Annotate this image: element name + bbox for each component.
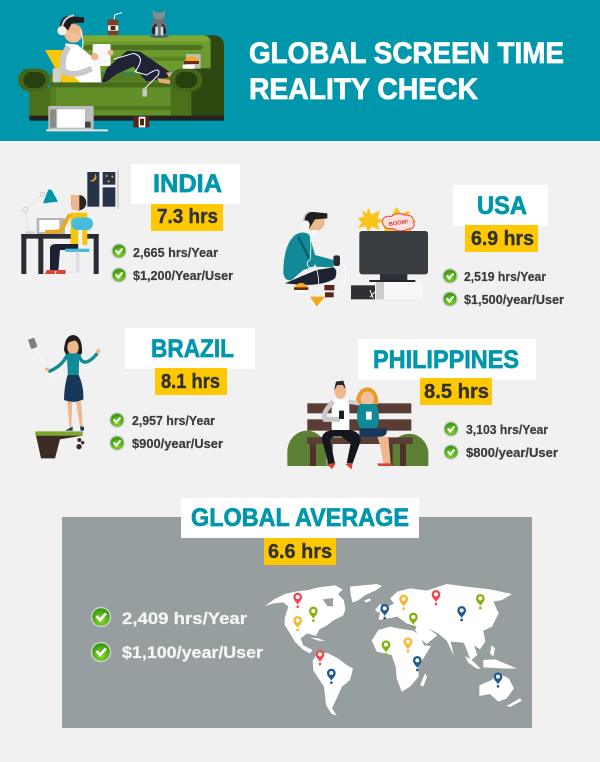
- stat: value per user: $900/year/User: [132, 437, 223, 451]
- hours badge: 8.1 hrs: [161, 371, 220, 393]
- heading: Philippines: [358, 339, 536, 380]
- panel: Philippines: [287, 339, 558, 469]
- hours badge: 6.6 hrs: [268, 541, 332, 563]
- country name: INDIA: [153, 170, 222, 198]
- stat: hours per year: 2,665 hrs/Year: [133, 246, 218, 260]
- illustration: woman taking selfie on cliff: [28, 335, 101, 458]
- hours badge: 8.5 hrs: [424, 381, 489, 403]
- country name: BRAZIL: [151, 335, 234, 363]
- illustration: couple on bench: [287, 381, 428, 469]
- stat: hours per year: 2,957 hrs/Year: [132, 414, 215, 428]
- heading: USA: [453, 185, 548, 226]
- world map with pins: [265, 584, 522, 715]
- stat: value per user: [443, 444, 558, 460]
- stat: hours per year: [442, 268, 546, 284]
- country name: PHILIPPINES: [373, 346, 519, 374]
- stat: hours per year: 2,409 hrs/Year: [122, 609, 247, 628]
- stat: value per user: [109, 435, 223, 451]
- country name: USA: [477, 192, 527, 220]
- illustration: person at desk: [21, 170, 119, 274]
- stat: hours per year: [443, 421, 548, 437]
- heading: Global average: [181, 498, 419, 538]
- stat: hours per year: 3,103 hrs/Year: [466, 423, 548, 437]
- hours badge: 6.9 hrs: [471, 228, 534, 250]
- header banner: [0, 0, 600, 141]
- panel: Brazil: [28, 328, 255, 458]
- stat: hours per year: 2,519 hrs/Year: [464, 270, 546, 284]
- hours badge: 7.3 hrs: [157, 206, 218, 228]
- title: GLOBAL SCREEN TIME: [249, 37, 564, 70]
- stat: value per user: $1,200/Year/User: [133, 269, 233, 283]
- panel: Global average: [62, 498, 532, 728]
- stat: value per user: $1,100/year/User: [122, 643, 263, 662]
- stat: hours per year: [111, 243, 218, 260]
- heading: Brazil: [125, 328, 255, 369]
- title: [249, 37, 564, 106]
- stat: value per user: $800/year/User: [466, 446, 558, 460]
- region name: GLOBAL AVERAGE: [191, 504, 409, 532]
- title: REALITY CHECK: [249, 73, 478, 106]
- panel: USA: [283, 185, 564, 307]
- illustration: man on sofa: [18, 10, 224, 131]
- stat: hours per year: [91, 607, 247, 628]
- stat: value per user: $1,500/year/User: [464, 293, 564, 307]
- stat: hours per year: [109, 412, 215, 428]
- heading: India: [131, 164, 240, 204]
- illustration: gamer with TV: BOOM!: [389, 219, 409, 228]
- panel: India: [21, 164, 240, 283]
- illustration: gamer with TV: [283, 207, 428, 307]
